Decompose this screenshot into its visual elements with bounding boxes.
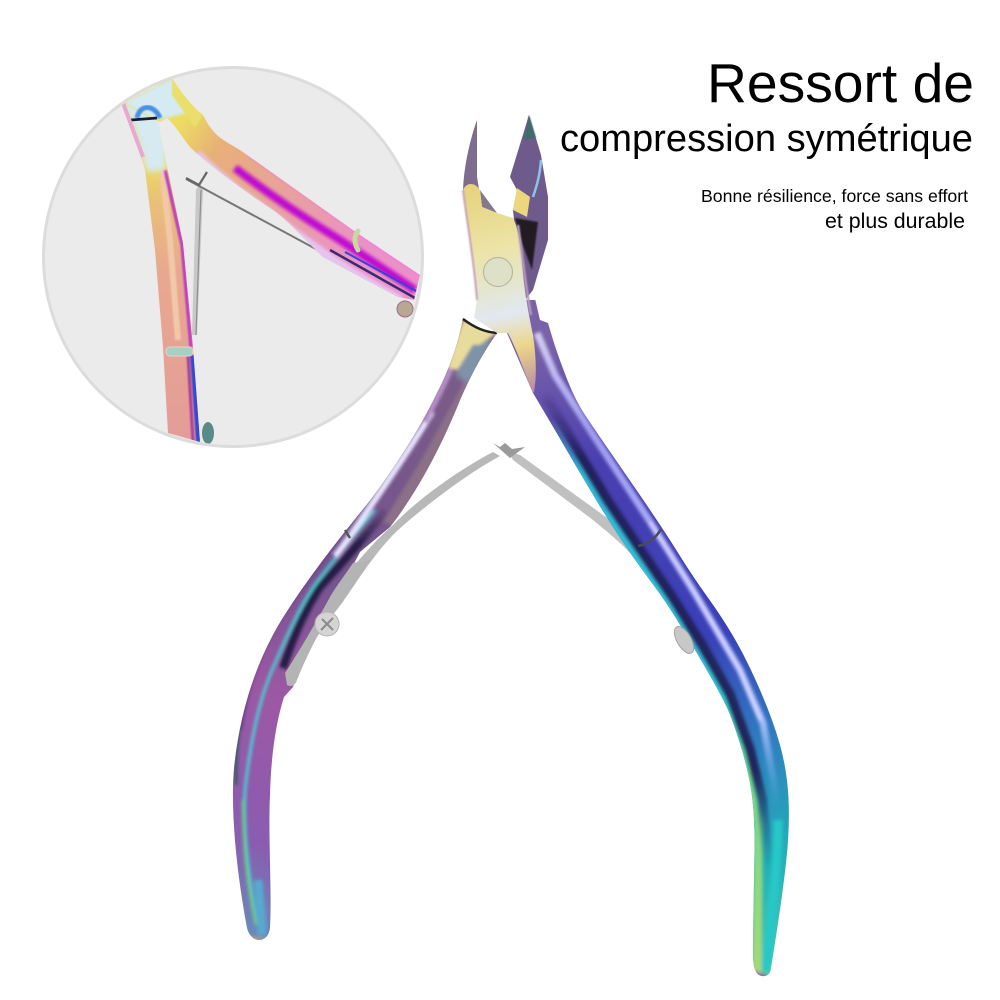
pivot rivet bbox=[484, 258, 512, 286]
inset: screws bbox=[397, 301, 413, 317]
spring: right leaf bbox=[508, 451, 640, 560]
illustration: iridescent cuticle nippers bbox=[220, 115, 810, 990]
left blade bbox=[463, 120, 497, 213]
title: Ressort de bbox=[707, 52, 974, 114]
left spring: mounting plate bbox=[285, 560, 370, 686]
spring: left leaf bbox=[330, 452, 500, 603]
inset: pivot junction bbox=[123, 103, 160, 157]
panel: magnified inset circle bbox=[44, 68, 430, 446]
description line 2: et plus durable bbox=[825, 210, 965, 233]
pivot plate: edge sheen bbox=[463, 190, 477, 300]
inset: vertical arm bbox=[124, 104, 200, 442]
right handle bbox=[507, 300, 789, 976]
left handle: dark shadow joint bbox=[463, 319, 497, 333]
left handle: screw bbox=[315, 612, 339, 636]
inset: arm notch on spine bbox=[355, 231, 358, 250]
inset circle background bbox=[44, 68, 422, 446]
inset: spring close-up bbox=[120, 70, 430, 445]
inset: angled arm bbox=[124, 79, 420, 300]
pivot plate bbox=[463, 184, 536, 393]
right blade bbox=[510, 115, 548, 300]
left handle: collar notch bbox=[345, 530, 350, 538]
spring: hinge clip bbox=[493, 443, 525, 458]
description line 1: Bonne résilience, force sans effort bbox=[701, 186, 968, 206]
right handle: collar ring bbox=[638, 529, 661, 546]
subtitle: compression symétrique bbox=[560, 118, 973, 160]
inset: ring on vertical arm bbox=[166, 347, 193, 356]
left handle bbox=[232, 318, 496, 940]
right handle: screw bbox=[670, 624, 698, 656]
